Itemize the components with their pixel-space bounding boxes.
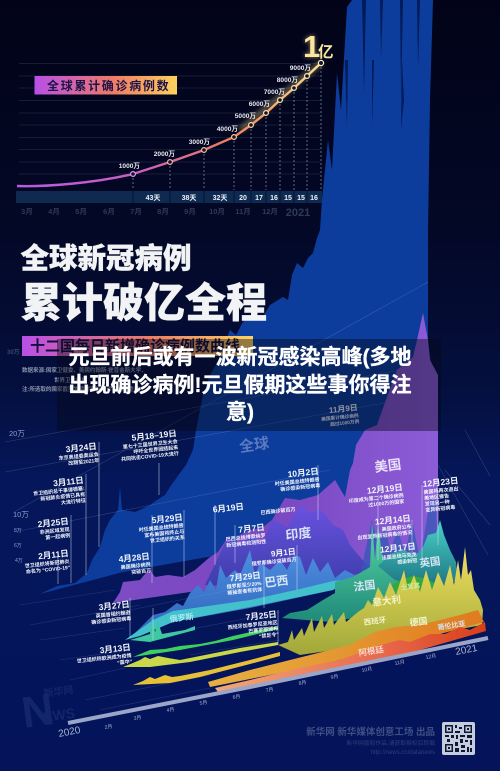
time band: 38天 [182,194,196,202]
annotations: dates and notes: 2月25日 [37,516,69,529]
annotations: dates and notes: 7月7日 [238,522,265,535]
time band: 16 [270,195,278,202]
annotations: dates and notes: 突破百万 [131,567,152,576]
country labels: 德国 [409,615,428,628]
month labels: 2021 [286,207,310,219]
annotations: dates and notes: 时任美国总统特朗普 [138,522,184,534]
annotations: dates and notes: “禁足令” [259,631,280,640]
chart: cumulative global cases [16,29,334,219]
time band [16,191,322,203]
annotations: dates and notes: 出现变异新冠病毒的情况 [357,529,413,542]
dashed drop lines [133,63,321,190]
annotation: 11月9日: 美国累计确诊病例 [321,412,359,423]
area: France [282,522,440,622]
subtitle banner: 十二国每日新增确诊病例数曲线 [30,337,240,355]
annotations: dates and notes: 7月29日 [229,570,261,583]
area: Italy and Spain [278,547,483,655]
annotations: dates and notes: 巴西确诊破百万 [260,506,296,516]
time axis: 11月 [394,659,405,667]
annotations: dates and notes: 改期至2021年 [68,457,100,467]
glow [240,63,321,130]
time axis [57,638,488,740]
country labels: 意大利 [372,594,402,609]
annotation: 11月9日: 超过1000万例 [330,418,360,428]
annotations: dates and notes: 7月25日 [245,609,277,622]
area: gold hump [133,652,280,685]
point labels: 1000万 [119,162,140,170]
country labels: 法国 [353,577,376,594]
annotations: dates and notes: 命名为 “COVID-19” [26,564,71,576]
annotations: dates and notes: 12月14日 [374,513,411,527]
annotations: dates and notes: 世卫组织总干事谭德塞: [33,485,85,497]
annotations: dates and notes: 第一起病例 [45,532,71,542]
annotations: dates and notes: 俄罗斯至少20% [226,580,262,591]
annotations: dates and notes: 西班牙加泰罗尼亚地区 [227,619,278,631]
country labels: 俄罗斯 [169,611,194,624]
annotations: dates and notes: 英国首相约翰逊 [95,609,131,620]
annotations: dates and notes: 3月27日 [98,599,130,612]
country labels: 土耳其 [400,581,421,592]
annotations: dates and notes: 4月28日 [118,551,150,564]
chart: twelve-country daily new cases: 变异新冠病毒 [425,504,456,514]
title: 全球新冠病例 [20,242,192,275]
1亿: 1 [303,29,320,64]
grid lines [5,282,490,555]
source notes: 注:所选取的国家截至发稿时累计确诊病例数靠前 [22,385,140,393]
time band: 17 [255,195,263,202]
month labels: 11月 [235,207,251,216]
time axis: 9月 [330,674,339,681]
point labels: 2000万 [154,150,175,158]
growth curve [17,63,321,186]
annotations: dates and notes: 新冠肺炎疫情已具有 [40,491,86,503]
annotations: dates and notes: 确诊感染新冠病毒 [91,615,132,626]
watermark logo: EWS [42,705,76,725]
chart: twelve-country daily new cases: 美国将再次退出 [423,485,459,496]
annotations: dates and notes: 12月17日 [379,541,416,555]
area: USA [113,313,438,603]
legend label [34,76,177,94]
month labels: 6月 [103,207,115,216]
country labels: 印度 [285,525,312,543]
area: Germany [208,610,484,687]
annotation: 11月9日 [320,403,360,429]
time axis: 8月 [298,680,307,687]
annotations: dates and notes: 世卫组织的关系 [150,534,185,545]
annotations: dates and notes: 巴塞罗那颁布 [248,625,279,635]
annotations: dates and notes: 9月1日 [270,547,296,559]
area: global [40,0,438,594]
y axis labels: 10万 [13,510,29,519]
1亿: 亿 [318,43,334,61]
time axis: 2021 [454,643,479,658]
annotation: 11月9日: 11月9日 [329,403,358,415]
annotations: dates and notes: 世卫组织称欧洲成为疫情 [76,652,132,665]
annotations: dates and notes: 宣布美国将终止与 [144,528,185,539]
annotations: dates and notes: 感染新冠 [397,557,418,566]
annotations: dates and notes: 印度成为第二个确诊病例 [348,492,404,505]
point labels: 6000万 [249,100,270,108]
annotations: dates and notes: 俄罗斯确诊突破百万 [251,556,297,568]
annotations: dates and notes: 5月18–19日 [131,428,177,443]
y axis labels: 8万 [14,528,22,534]
watermark logo: 新华网 [43,683,74,700]
area: early European spike [130,617,195,642]
area: yellow hump [123,642,278,667]
month labels: 4月 [48,207,60,216]
time axis: 2月 [104,724,113,731]
annotations: dates and notes: 非洲区域发现 [39,526,70,536]
1亿 [303,29,334,64]
point labels: 8000万 [277,76,298,84]
watermark logo [19,683,76,738]
dark notches in the blue tower [345,0,420,130]
chart: twelve-country daily new cases: 发现另一种 [424,498,450,508]
month labels [21,207,310,219]
chart: twelve-country daily new cases: 12月23日 [422,475,459,489]
annotations: dates and notes: 巴西总统博索纳罗 [225,532,266,543]
annotations: dates and notes: 法国总统马克龙 [381,551,417,562]
annotations: dates and notes: 过1000万的国家 [368,498,405,509]
title [20,242,267,326]
point labels: 3000万 [189,138,210,146]
time band: 20 [239,195,247,202]
annotations: dates and notes: 2月11日 [38,548,69,561]
time band: 32天 [213,194,227,202]
y axis labels [9,429,29,564]
time band: 16 [310,195,318,202]
country labels: 英国 [419,555,441,570]
area: Colombia and Argentina [215,622,486,692]
time axis: 5月 [199,700,208,707]
area: thin green strip [133,626,278,657]
annotations: dates and notes: 世卫组织将新冠肺炎 [24,558,70,570]
annotations: dates and notes: 东京奥组委奥运会 [58,451,99,462]
annotations: dates and notes: 3月13日 [99,642,131,655]
point labels: 5000万 [235,112,256,120]
country labels: 美国 [373,456,402,475]
time axis: 3月 [133,715,142,722]
area: Turkey [392,576,452,600]
country labels: 巴西 [264,573,289,590]
annotations: dates and notes: 确诊感染新冠病毒 [280,482,321,493]
month labels: 12月 [262,207,278,216]
source notes: 世界卫生组织 [54,376,88,384]
time band: 43天 [146,194,160,202]
annotations: dates and notes: 第七十三届世界卫生大会 [122,438,178,451]
y axis labels: 4万 [15,558,23,564]
annotations: dates and notes: 美国确诊病例 [120,561,151,571]
overlay panel: headline banner [57,339,441,431]
1亿: 1 [303,29,320,64]
source notes: 30万 [7,349,20,356]
area: Russia [125,580,345,640]
month labels: 8月 [157,207,169,216]
annotations: dates and notes: 5月29日 [151,512,183,525]
annotations: dates and notes: 被抽查者有抗体 [227,586,263,597]
country labels [169,434,466,658]
annotations: dates and notes [23,428,418,671]
month labels: 5月 [75,207,87,216]
month labels: 10月 [209,207,225,216]
annotations: dates and notes: “震中” [117,658,133,666]
annotations: dates and notes: 呼吁全世界团结起来 [133,444,179,456]
QR code [442,722,475,755]
annotations: dates and notes: 共同抗击COVID-19大流行 [121,450,179,463]
time band: 15 [297,195,305,202]
time axis: 7月 [265,687,274,694]
month labels: 9月 [184,207,196,216]
source notes [7,349,147,393]
point labels: 7000万 [264,88,285,96]
chart: twelve-country daily new cases: 美地区报告 [424,492,449,502]
headline text: 元旦前后或有一波新冠感染高峰(多地出现确诊病例!元旦假期这些事你得注意) [68,346,412,424]
legend label: 全球累计确诊病例数 [47,78,170,93]
time band: 15 [284,195,292,202]
area: USA winter teeth [360,500,438,575]
y axis labels: 6万 [14,543,22,549]
annotations: dates and notes: 3月11日 [53,475,84,488]
annotations: dates and notes: 3月24日 [65,441,97,454]
point labels: 9000万 [290,64,311,72]
time axis: 12月 [425,653,437,661]
annotations: dates and notes: 大流行特征 [61,497,86,506]
watermark logo: N [19,685,57,738]
annotations: dates and notes: 时任美国总统特朗普 [274,476,320,488]
annotations: dates and notes: 6月19日 [212,501,244,514]
annotation stems [58,442,438,645]
footer credits: 新华网版权作品,请获取授权后转载 [346,739,435,747]
title: 累计破亿全程 [21,280,267,326]
data points [131,60,324,176]
time axis: 2020 [57,725,82,740]
area: Brazil [130,550,360,638]
annotations: dates and notes: 新冠病毒检测阳性 [226,538,267,549]
country labels: 全球 [238,434,270,456]
footer credits: http://news.cn/datanews [371,750,435,756]
country labels: 阿根廷 [358,644,385,658]
area: UK [378,520,458,590]
time axis: 4月 [166,707,175,714]
country labels: 哥伦比亚 [437,619,466,632]
footer credits [306,726,435,756]
point labels [119,64,311,170]
footer credits: 新华网 新华媒体创意工场 出品 [306,726,435,738]
point labels: 4000万 [217,125,238,133]
source notes: 数据来源:国家卫健委、美国约翰斯·霍普金斯大学、 [22,366,147,374]
annotations: dates and notes: 10月2日 [287,466,319,479]
annotations: dates and notes: 12月19日 [366,482,403,496]
annotations: dates and notes: 美国政府公布 [381,523,412,533]
month labels: 3月 [21,207,33,216]
area: India [205,505,372,590]
country labels: 西班牙 [363,614,387,627]
month labels: 7月 [130,207,142,216]
time axis: 10月 [361,666,373,674]
time axis: 6月 [232,694,241,701]
y axis labels: 20万 [9,429,25,438]
